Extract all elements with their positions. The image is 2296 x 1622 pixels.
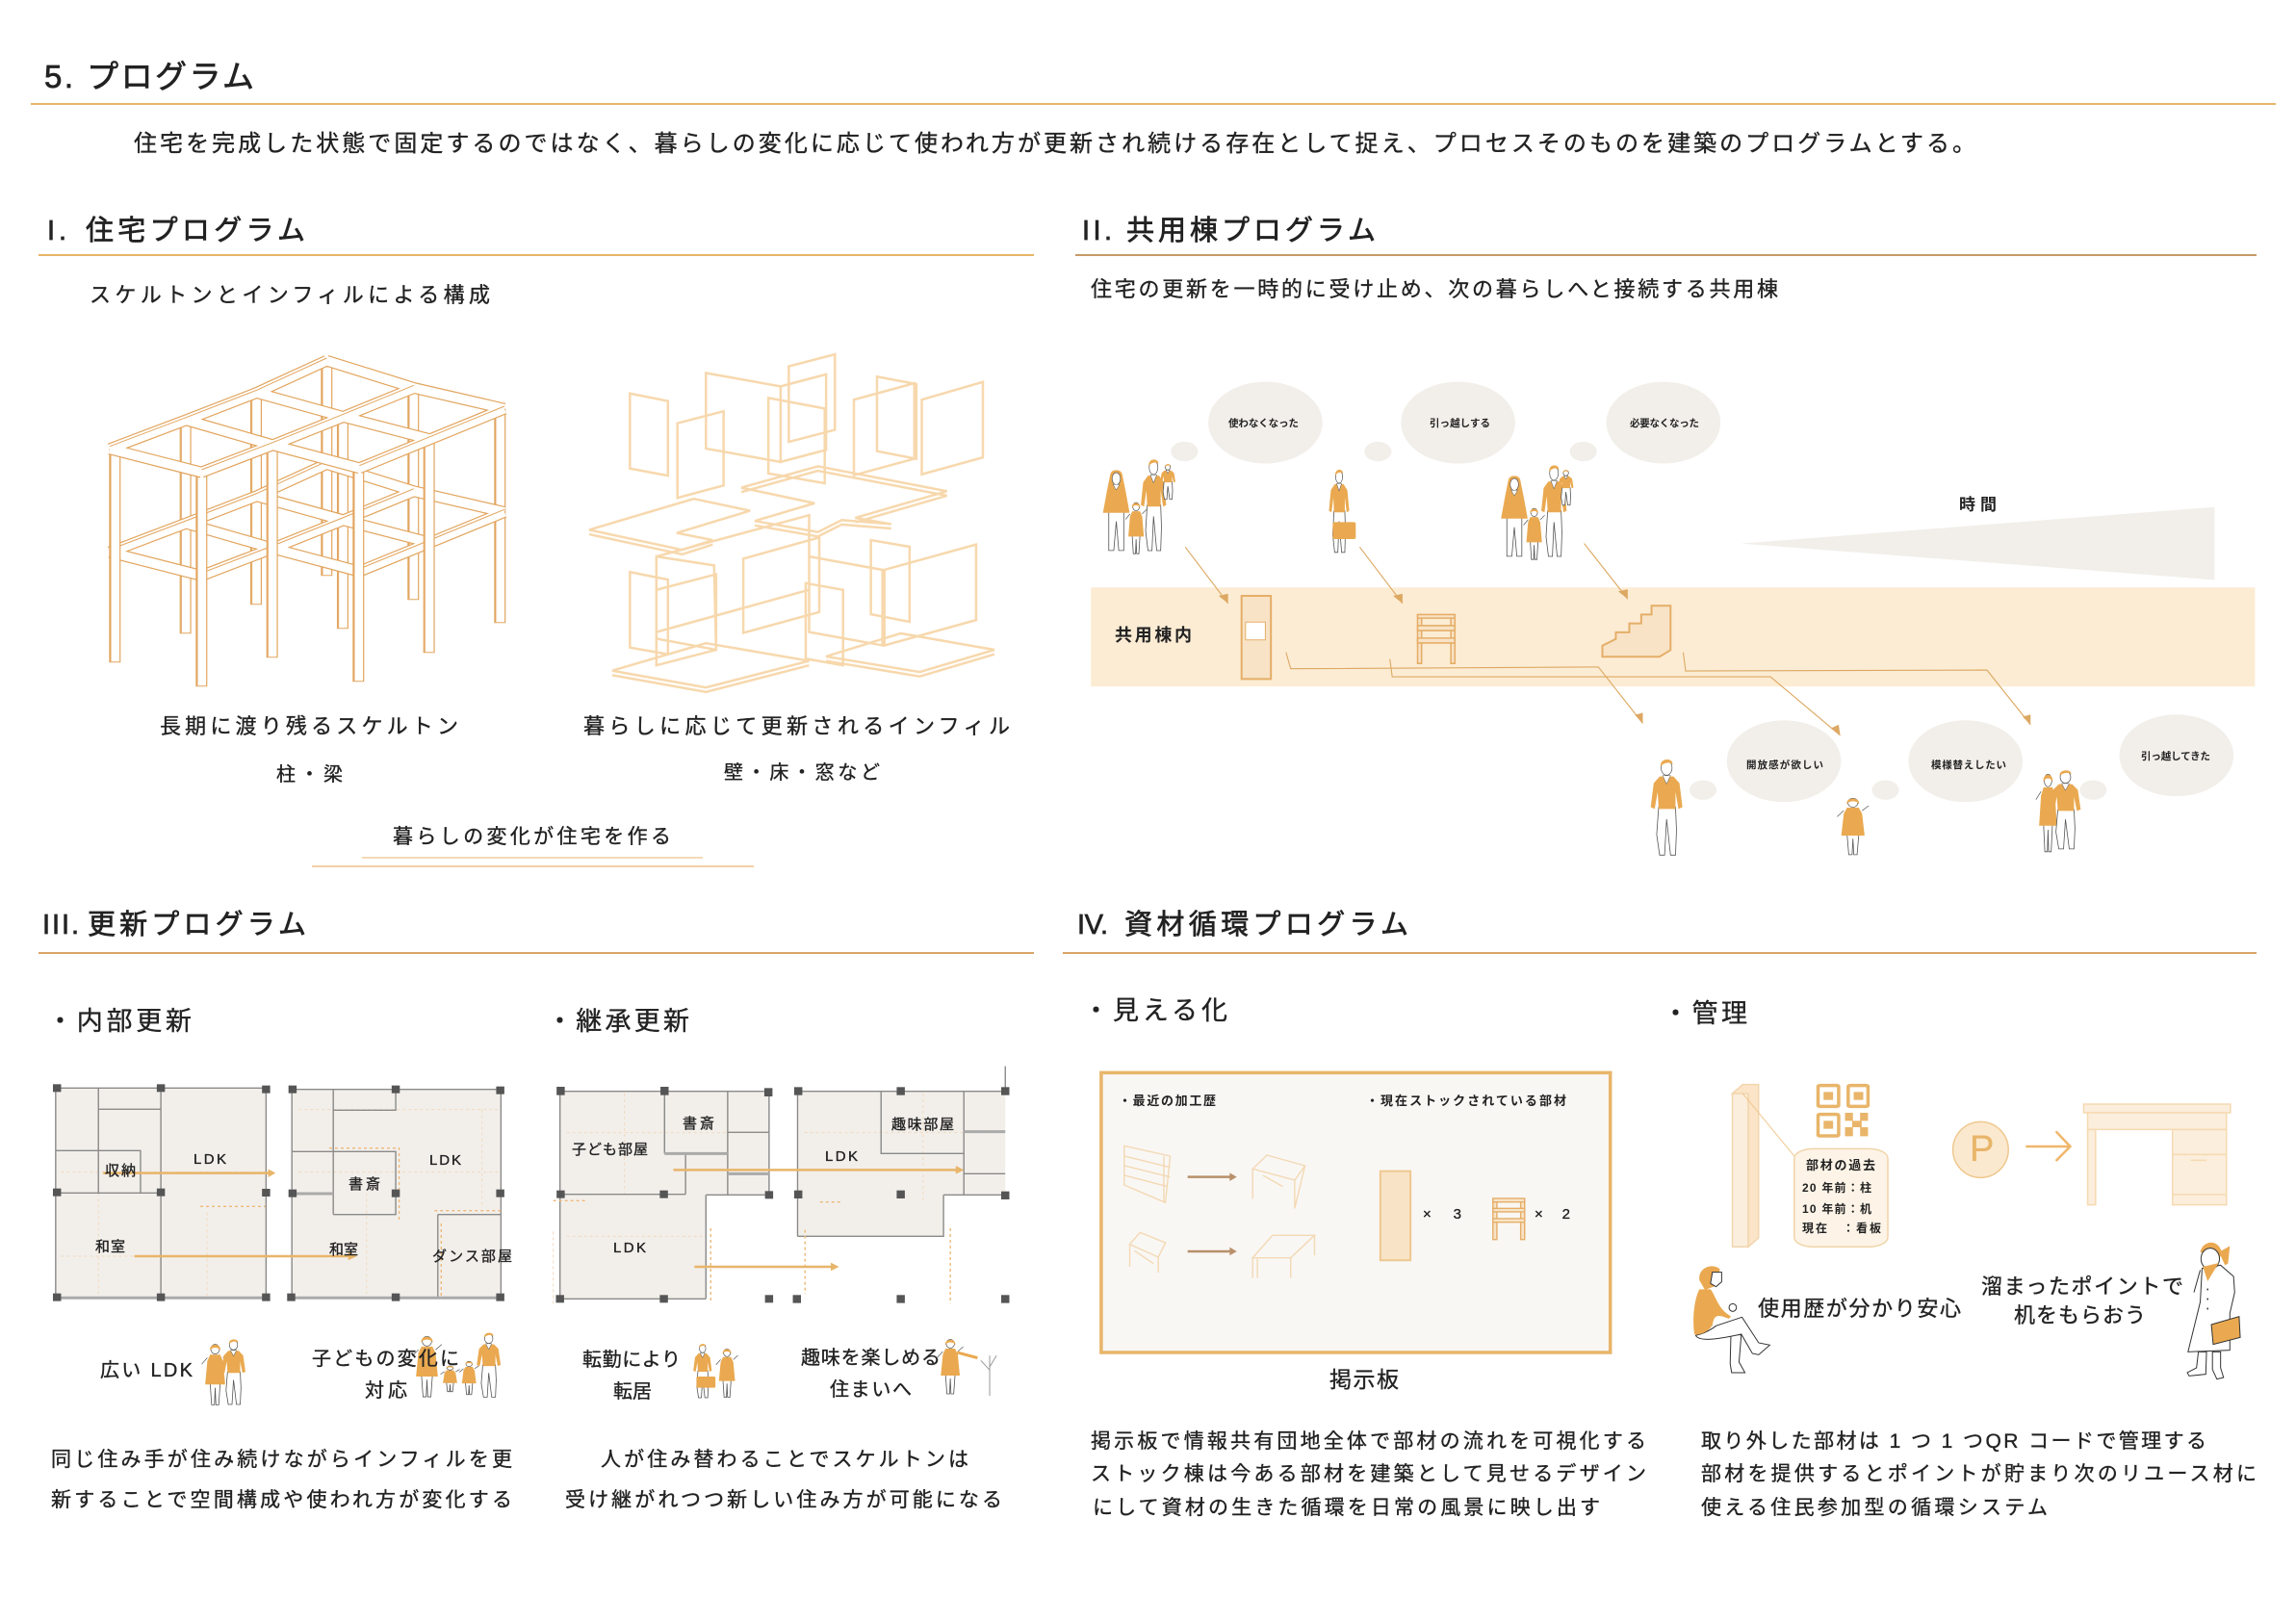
arrow to desk	[2025, 1131, 2070, 1161]
furniture: shelf	[1242, 596, 1271, 679]
people and caption figures	[201, 1333, 996, 1404]
stock: column	[1380, 1171, 1410, 1260]
captions: 住まいへ	[830, 1378, 912, 1401]
subheading: 住宅の更新を一時的に受け止め、次の暮らしへと接続する共用棟	[1091, 277, 1778, 301]
room labels	[95, 1116, 954, 1265]
bubble texts: 引っ越してきた	[2141, 750, 2210, 762]
intro text: 住宅を完成した状態で固定するのではなく、暮らしの変化に応じて使われ方が更新され続ける存在として捉え、プロセスそのものを建築のプログラムとする。	[134, 131, 1975, 157]
bubble texts	[1228, 417, 2210, 771]
people: moving couple	[693, 1344, 738, 1398]
time label: 時間	[1959, 496, 1997, 514]
sketch: desk to table	[1130, 1232, 1314, 1278]
subheading: skeleton and infill: スケルトンとインフィルによる構成	[90, 283, 490, 307]
heading: I: 住宅プログラム	[86, 215, 305, 246]
people: family left	[1103, 459, 1175, 554]
room labels: LDK	[429, 1152, 461, 1169]
sketch: shelf to desk	[1124, 1146, 1305, 1208]
caption: peace of mind: 使用歴が分かり安心	[1758, 1297, 1961, 1321]
plan 4	[793, 1067, 1009, 1303]
people: family with children	[412, 1333, 501, 1397]
thought bubbles lower	[1690, 714, 2233, 802]
furniture: stool	[1418, 614, 1455, 663]
captions: 子どもの変化に	[312, 1348, 459, 1370]
room labels: LDK	[825, 1148, 858, 1165]
bubble texts: 使わなくなった	[1228, 417, 1299, 429]
paragraph: interior renewal: 同じ住み手が住み続けながらインフィルを更	[51, 1449, 512, 1471]
bubble texts: 引っ越しする	[1430, 417, 1490, 429]
card text: 部材の過去	[1806, 1158, 1875, 1172]
room labels: 書斎	[683, 1116, 714, 1132]
subheading: succession renewal: ・継承更新	[547, 1007, 689, 1036]
captions: 転居	[613, 1380, 652, 1403]
bubble texts: 必要なくなった	[1630, 417, 1699, 429]
heading: I: I.	[47, 216, 66, 246]
room labels: 子ども部屋	[572, 1142, 648, 1158]
caption: use points: 溜まったポイントで	[1981, 1274, 2183, 1299]
person: gardener	[938, 1339, 996, 1396]
paragraph: succession renewal: 人が住み替わることでスケルトンは	[601, 1449, 968, 1471]
furniture: stairs	[1602, 605, 1670, 657]
card text: 20 年前：柱	[1802, 1180, 1871, 1195]
plan 3	[554, 1087, 773, 1303]
thought bubbles upper	[1171, 382, 1720, 464]
card text: 10 年前：机	[1802, 1201, 1871, 1216]
paragraph: succession renewal: 受け継がれつつ新しい住み方が可能になる	[565, 1489, 1002, 1511]
QR code	[1819, 1086, 1868, 1136]
panel: III renewal program	[39, 909, 1034, 1511]
captions: 広い LDK	[100, 1359, 193, 1381]
paragraph: visualisation: にして資材の生きた循環を日常の風景に映し出す	[1093, 1497, 1600, 1519]
heading: III: 更新プログラム	[88, 909, 306, 940]
room labels: LDK	[613, 1240, 646, 1256]
heading: IV: 資材循環プログラム	[1124, 909, 1408, 940]
paragraph: visualisation: 掲示板で情報共有団地全体で部材の流れを可視化する	[1091, 1430, 1646, 1453]
paragraph: visualisation: ストック棟は今ある部材を建築として見せるデザイン	[1091, 1463, 1646, 1485]
skeleton frame drawing	[110, 358, 504, 686]
board label: current stock: ・現在ストックされている部材	[1366, 1094, 1566, 1108]
subheading: interior renewal: ・内部更新	[47, 1007, 192, 1036]
card text: 現在 ：看板	[1802, 1221, 1881, 1235]
desk	[2083, 1104, 2231, 1205]
panel: II shared building program	[1075, 215, 2257, 855]
floor plans	[53, 1067, 1009, 1303]
title: 5. プログラム	[44, 59, 254, 94]
people: walking person with bag	[1329, 470, 1355, 553]
person: child	[1837, 798, 1869, 855]
reused column with QR link	[1733, 1085, 1794, 1247]
room labels: 趣味部屋	[891, 1117, 954, 1133]
person: older man	[1651, 760, 1683, 855]
panel: I housing program	[39, 215, 1034, 866]
captions: 転勤により	[582, 1349, 681, 1371]
bubble texts: 模様替えしたい	[1931, 759, 2006, 771]
panel: IV material cycle program	[1063, 909, 2257, 1519]
people: couple in LDK	[201, 1339, 245, 1404]
subheading: visualisation: ・見える化	[1083, 996, 1227, 1025]
room labels: LDK	[193, 1151, 226, 1168]
heading: II: 共用棟プログラム	[1126, 215, 1376, 246]
room labels: 収納	[105, 1163, 136, 1179]
label: walls floors windows: 壁・床・窓など	[724, 761, 880, 784]
band label: 共用棟内	[1115, 626, 1192, 645]
room labels: ダンス部屋	[432, 1249, 512, 1265]
person: seated	[1693, 1266, 1769, 1373]
stock: stool	[1493, 1198, 1525, 1240]
stock counts	[1423, 1206, 1570, 1223]
drawings	[1101, 1072, 2231, 1352]
renewal arrows	[103, 1166, 964, 1271]
plan 2	[287, 1086, 504, 1301]
time triangle	[1741, 507, 2214, 579]
paragraph: visualisation	[1091, 1430, 1646, 1519]
info card	[1794, 1148, 1888, 1247]
point token	[1953, 1121, 2008, 1177]
people: family centre	[1501, 465, 1573, 559]
board caption: 掲示板	[1329, 1367, 1399, 1392]
stock counts: × 2	[1535, 1206, 1570, 1223]
card text	[1802, 1158, 1881, 1235]
room labels: 和室	[95, 1239, 125, 1255]
captions: 趣味を楽しめる	[801, 1347, 941, 1369]
people: couple	[2036, 770, 2080, 852]
captions: 対応	[365, 1379, 407, 1402]
room labels: 書斎	[348, 1176, 380, 1193]
label: changing infill: 暮らしに応じて更新されるインフィル	[583, 714, 1010, 738]
label: columns and beams: 柱・梁	[276, 763, 343, 785]
person: woman with coat and bag	[2187, 1243, 2240, 1379]
paragraph: management: 取り外した部材は 1 つ 1 つQR コードで管理する	[1701, 1430, 2206, 1453]
flow arrows	[1185, 544, 2030, 735]
bubble texts: 開放感が欲しい	[1746, 759, 1823, 771]
subheading: management: ・管理	[1663, 999, 1747, 1028]
paragraph: interior renewal	[51, 1449, 512, 1511]
plan 1	[53, 1084, 271, 1301]
heading: III: III.	[42, 910, 79, 940]
board label: recent processing: ・最近の加工歴	[1119, 1094, 1216, 1108]
paragraph: management: 部材を提供するとポイントが貯まり次のリユース材に	[1701, 1463, 2257, 1485]
paragraph: management: 使える住民参加型の循環システム	[1701, 1497, 2048, 1519]
heading: II: II.	[1082, 216, 1112, 246]
label: long-lasting skeleton: 長期に渡り残るスケルトン	[160, 714, 458, 738]
room labels: 和室	[329, 1242, 358, 1258]
conclusion: 暮らしの変化が住宅を作る	[393, 826, 671, 848]
paragraph: interior renewal: 新することで空間構成や使われ方が変化する	[51, 1489, 512, 1511]
point symbol: P	[1970, 1129, 1994, 1170]
stock counts: × 3	[1423, 1206, 1461, 1223]
captions	[100, 1347, 941, 1403]
caption: use points: 机をもらおう	[2014, 1303, 2146, 1327]
paragraph: succession renewal	[565, 1449, 1002, 1511]
band: inside shared building	[1091, 587, 2255, 686]
paragraph: management	[1701, 1430, 2257, 1519]
diagram shapes	[1091, 382, 2255, 855]
heading: IV: IV.	[1077, 910, 1108, 940]
infill drawing	[589, 354, 994, 692]
bulletin board	[1101, 1072, 1611, 1352]
caption: use points	[1981, 1274, 2183, 1327]
